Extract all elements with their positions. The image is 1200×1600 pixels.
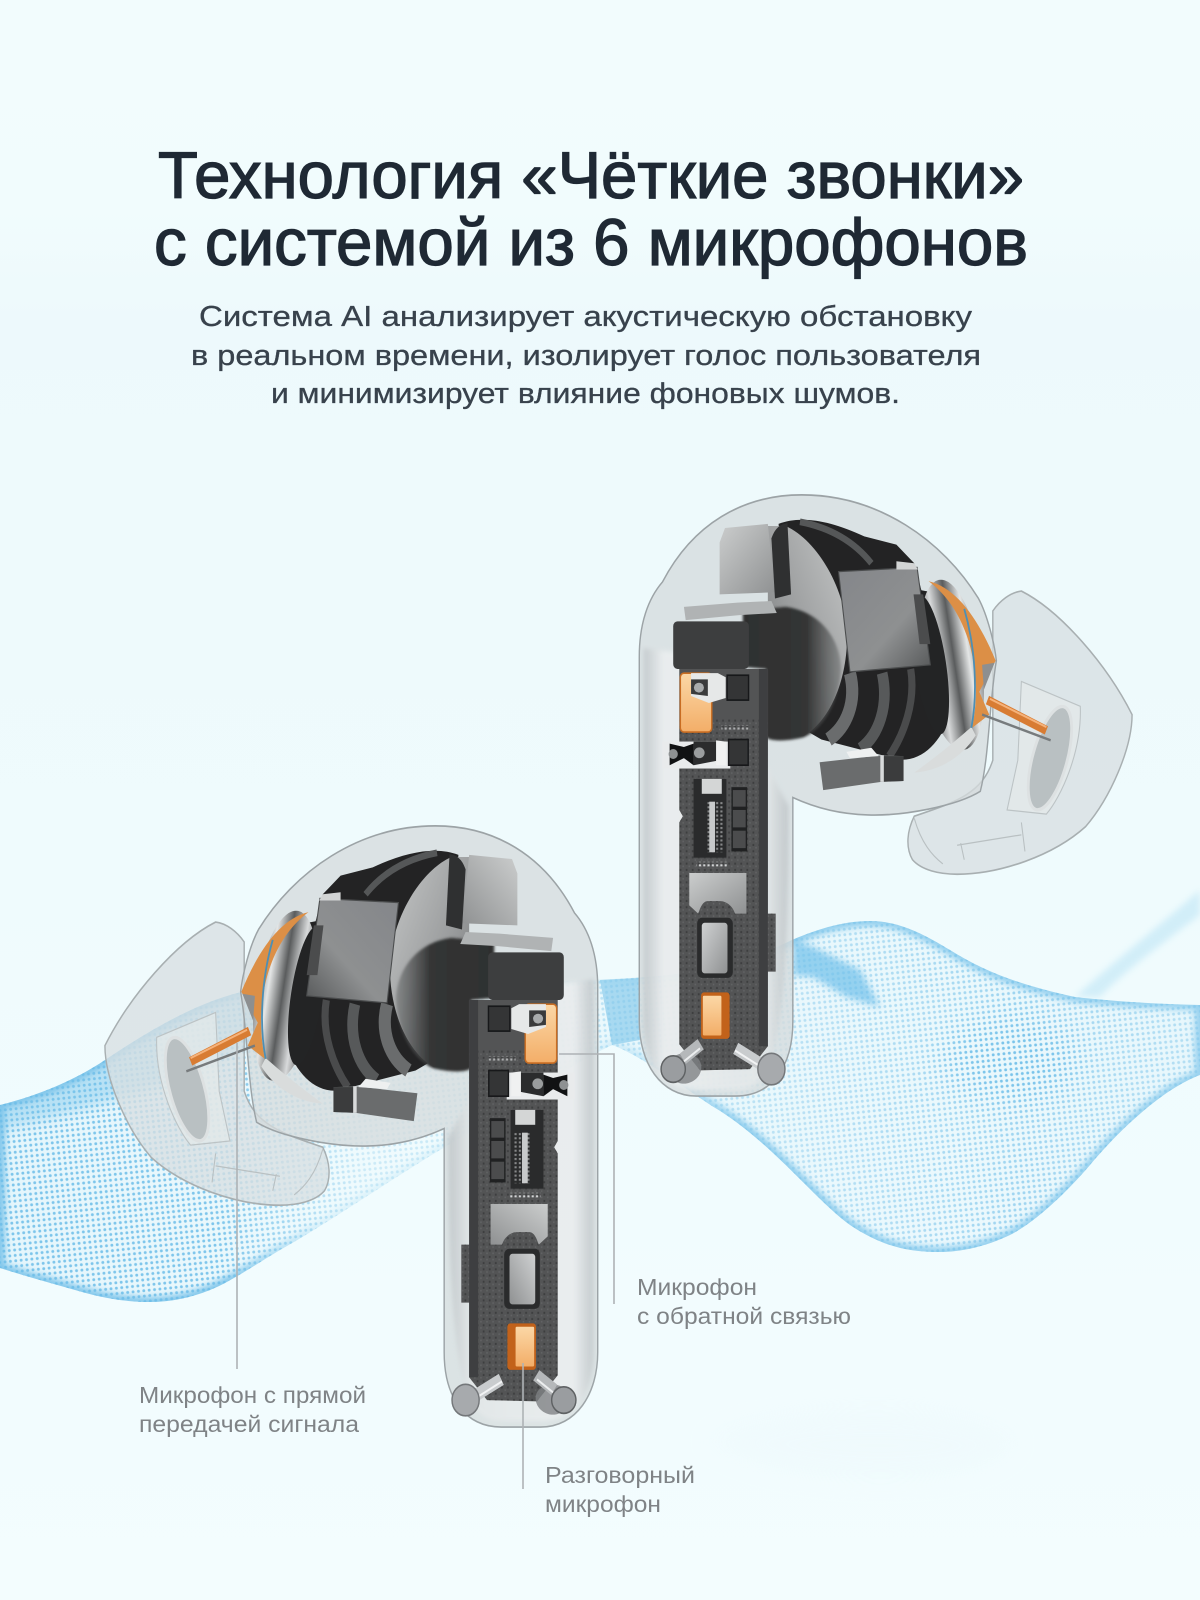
label: talk microphone: Разговорный — [545, 1462, 695, 1488]
nozzle — [1007, 681, 1081, 816]
chip row — [662, 739, 748, 769]
silver chip — [697, 918, 733, 978]
label: talk microphone: микрофон — [545, 1491, 661, 1517]
earbud: upper right — [639, 495, 1132, 1096]
callout lines — [237, 1043, 614, 1489]
ear tip — [908, 591, 1132, 874]
title: с системой из 6 микрофонов — [154, 205, 1028, 279]
title — [154, 138, 1028, 279]
big disc — [768, 526, 847, 736]
square bracket — [839, 561, 930, 672]
silver plate — [689, 873, 746, 914]
sound wave ribbon — [0, 890, 1200, 1320]
subtitle text: и минимизирует влияние фоновых шумов. — [271, 378, 900, 410]
label: feedforward microphone: Микрофон с прямой — [139, 1382, 366, 1408]
label: feedforward microphone — [139, 1382, 366, 1437]
subtitle text — [191, 301, 981, 410]
lower bracket — [820, 748, 904, 790]
label: feedforward microphone: передачей сигнала — [139, 1411, 359, 1437]
orange chip upper — [680, 673, 750, 732]
title: Технология «Чёткие звонки» — [158, 138, 1024, 212]
subtitle text: Система AI анализирует акустическую обстановку — [199, 301, 973, 333]
earbud: lower left — [105, 826, 598, 1427]
label: feedback microphone: с обратной связью — [637, 1303, 851, 1329]
dark core — [743, 607, 841, 741]
driver stack — [779, 520, 996, 773]
stem wall — [644, 648, 789, 1090]
orange rod — [982, 699, 1051, 740]
label: talk microphone — [545, 1462, 695, 1517]
shell — [639, 495, 996, 1096]
label: feedback microphone — [637, 1274, 851, 1329]
circuit board — [679, 669, 776, 1070]
rear bracket — [684, 523, 791, 620]
orange chip lower — [701, 992, 730, 1039]
label: feedback microphone: Микрофон — [637, 1274, 757, 1300]
subtitle text: в реальном времени, изолирует голос пользователя — [191, 340, 981, 372]
dark block — [673, 621, 749, 669]
microphones — [661, 1044, 785, 1085]
